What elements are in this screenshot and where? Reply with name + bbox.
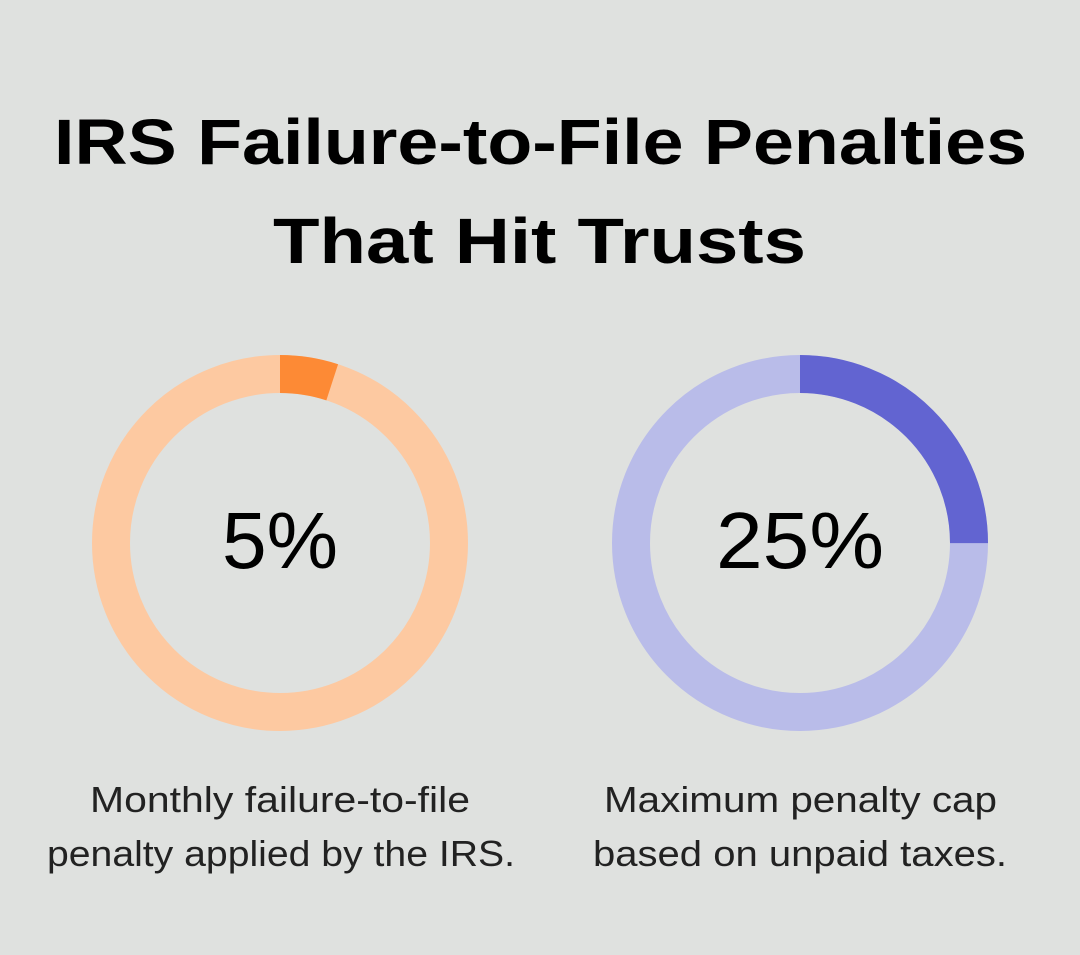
title: That Hit Trusts bbox=[273, 205, 806, 277]
caption: maximum cap: Maximum penalty cap bbox=[604, 779, 997, 820]
value: 5%: 5% bbox=[222, 496, 338, 585]
value: 25%: 25% bbox=[716, 496, 884, 585]
panel: 5% donut bbox=[47, 374, 515, 874]
caption: monthly penalty bbox=[47, 779, 515, 874]
title bbox=[54, 106, 1027, 277]
panel: 25% donut bbox=[593, 374, 1007, 874]
caption: monthly penalty: Monthly failure-to-file bbox=[90, 779, 470, 820]
caption: monthly penalty: penalty applied by the IRS. bbox=[47, 833, 515, 874]
caption: maximum cap bbox=[593, 779, 1007, 874]
donut chart: 5% bbox=[111, 374, 449, 712]
caption: maximum cap: based on unpaid taxes. bbox=[593, 833, 1007, 874]
donut chart: 25% bbox=[631, 374, 969, 712]
title: IRS Failure-to-File Penalties bbox=[54, 106, 1027, 178]
